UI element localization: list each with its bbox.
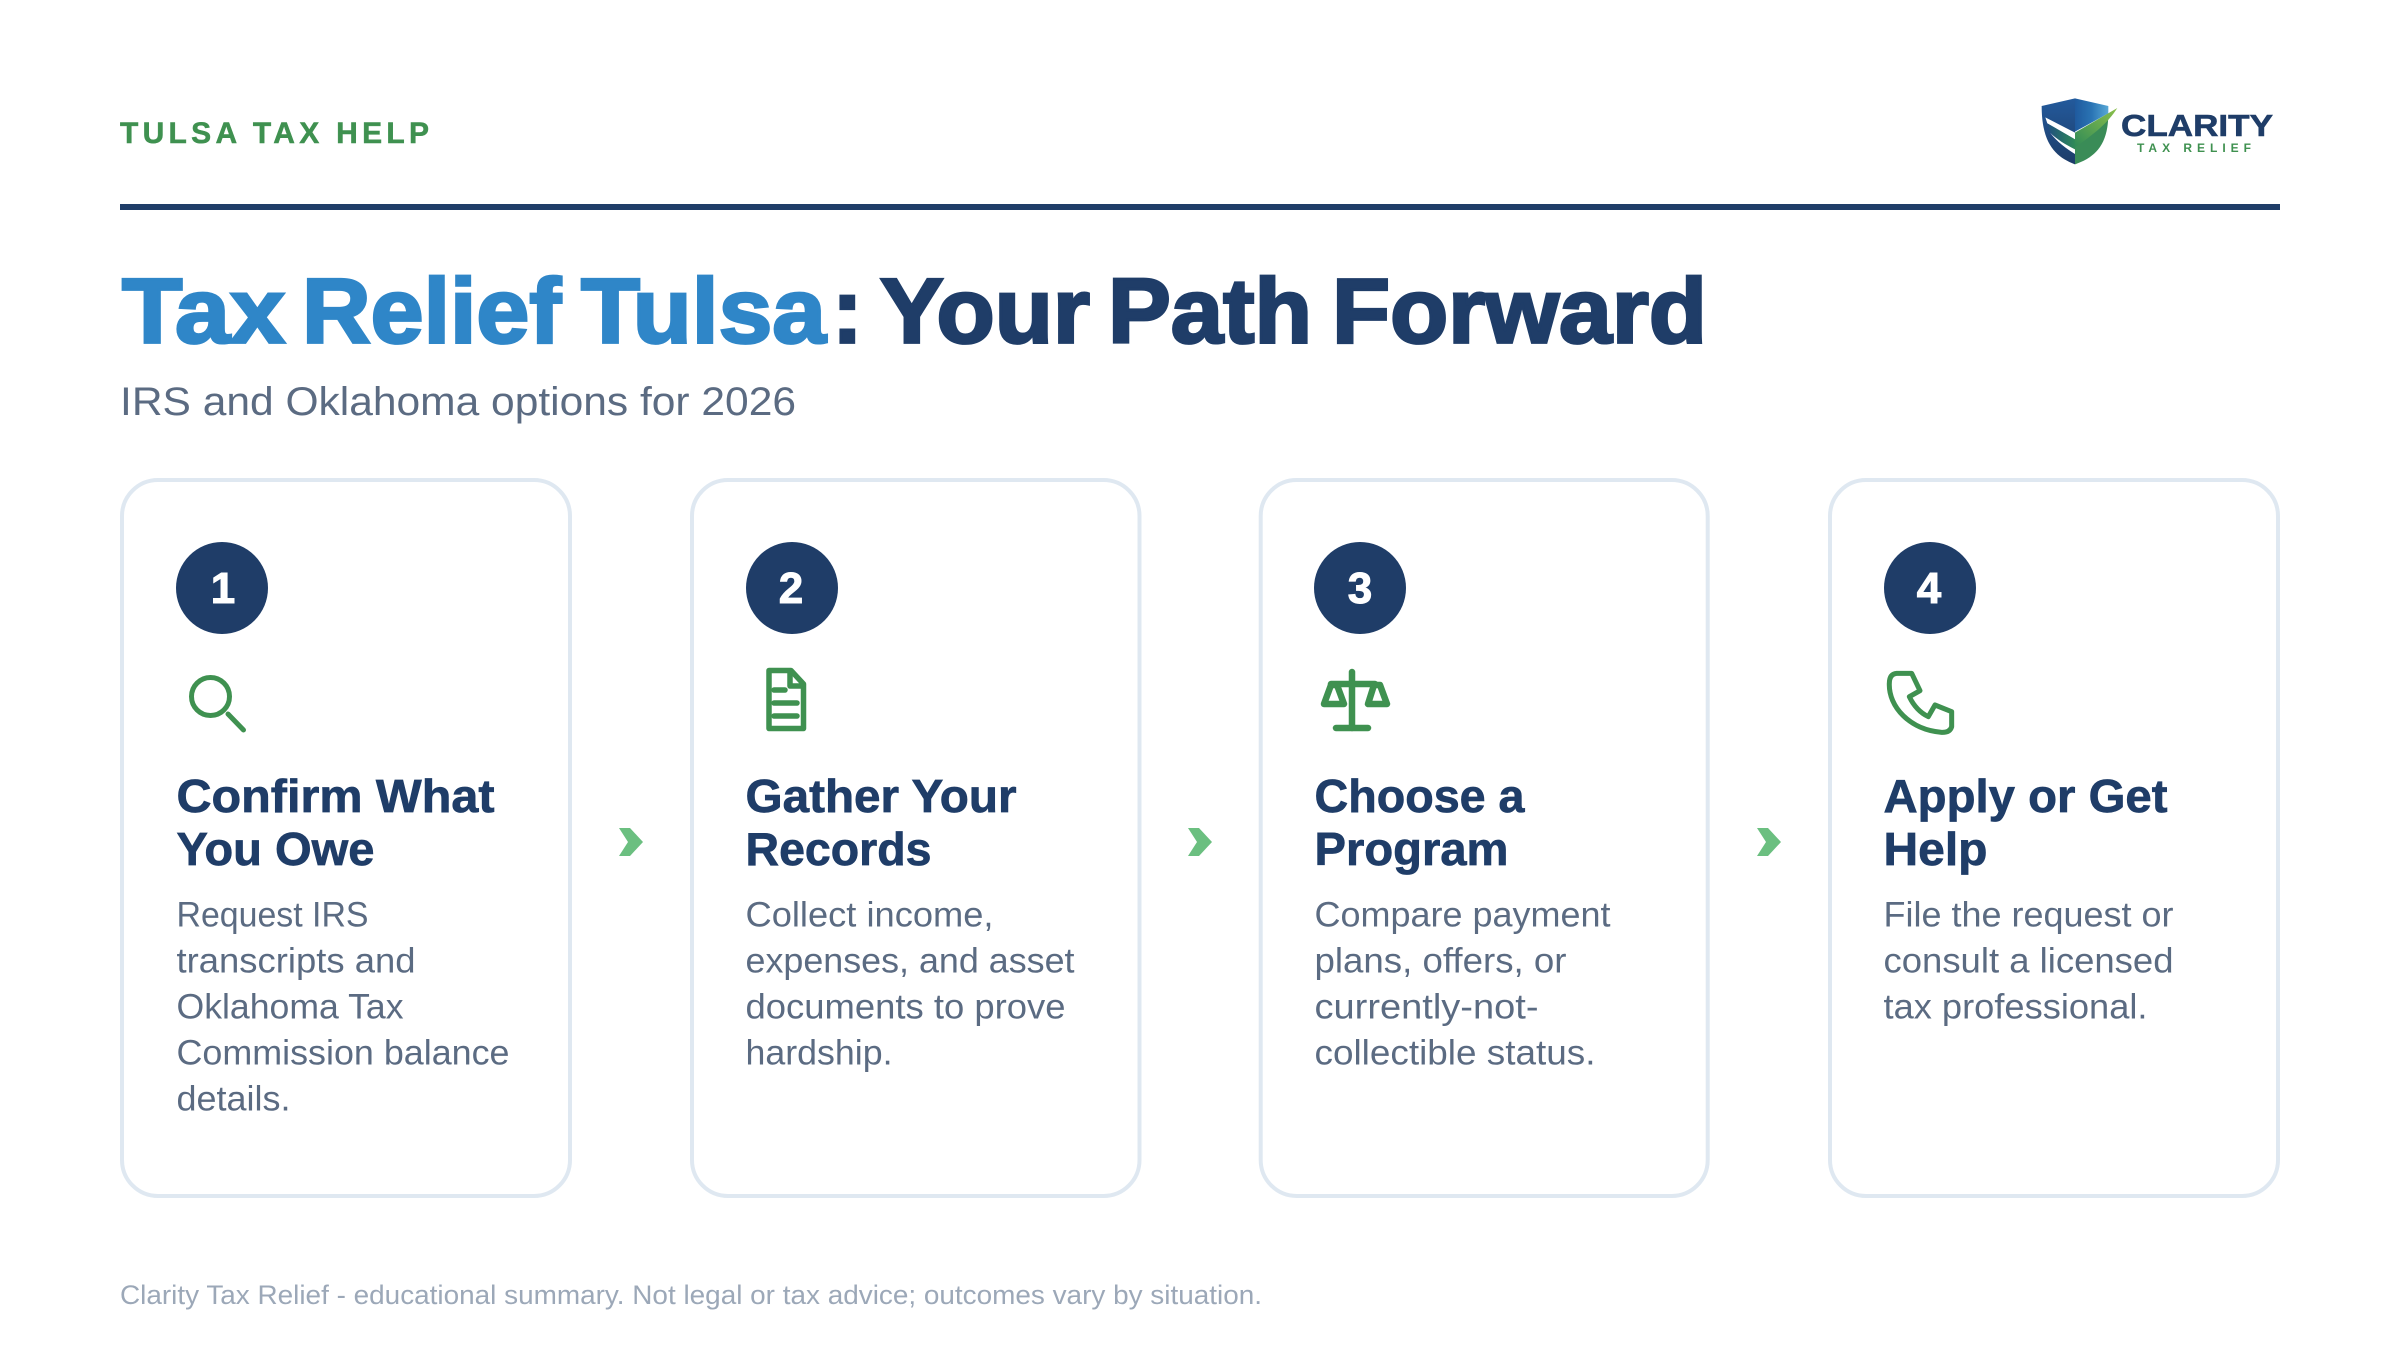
arrow 2 bbox=[1188, 828, 1212, 856]
body: step 3: plans, offers, or bbox=[1314, 942, 1567, 980]
panel: step 2 bbox=[692, 480, 1140, 1196]
logo wordmark: CLARITY bbox=[2121, 108, 2273, 143]
body: step 1: Commission balance bbox=[176, 1034, 510, 1072]
title: : bbox=[832, 260, 863, 362]
heading: step 2: Records bbox=[746, 823, 932, 875]
step number 4 bbox=[1884, 542, 1976, 634]
footer disclaimer: Clarity Tax Relief - educational summary. Not legal or tax advice; outcomes vary by situation. bbox=[120, 1280, 1262, 1310]
body: step 3: Compare payment bbox=[1314, 896, 1611, 934]
heading: step 4: Help bbox=[1884, 823, 1988, 875]
arrow 3 bbox=[1757, 828, 1781, 856]
icon: shield with check bbox=[2042, 98, 2117, 164]
body: step 3: currently-not- bbox=[1314, 988, 1538, 1026]
icon: phone bbox=[1889, 673, 1952, 732]
body: step 4 bbox=[1884, 896, 2174, 1026]
icon: balance scale bbox=[1324, 672, 1387, 728]
step number 2 bbox=[746, 542, 838, 634]
panel: step 3 bbox=[1261, 480, 1708, 1196]
step number 4: 4 bbox=[1917, 564, 1942, 613]
title: Forward bbox=[1332, 260, 1707, 362]
heading: step 3 bbox=[1314, 770, 1525, 875]
body: step 2: Collect income, bbox=[746, 896, 994, 934]
icon: document bbox=[769, 670, 804, 728]
arrow 1 bbox=[619, 828, 643, 856]
heading: step 1: You Owe bbox=[176, 823, 374, 875]
subtitle: IRS and Oklahoma options for 2026 bbox=[120, 380, 796, 424]
panel: step 1 bbox=[122, 480, 570, 1196]
title: Tax bbox=[122, 260, 285, 362]
icon: magnifier bbox=[192, 678, 244, 730]
body: step 2 bbox=[746, 896, 1075, 1072]
body: step 4: consult a licensed bbox=[1884, 942, 2174, 980]
body: step 4: tax professional. bbox=[1884, 988, 2148, 1026]
eyebrow label: TULSA TAX HELP bbox=[120, 117, 429, 150]
header rule bbox=[120, 204, 2280, 210]
title: Your bbox=[880, 260, 1090, 362]
step number 1 bbox=[176, 542, 268, 634]
title: Tulsa bbox=[581, 260, 827, 362]
body: step 3: collectible status. bbox=[1314, 1034, 1596, 1072]
logo: Clarity Tax Relief bbox=[2042, 98, 2273, 164]
heading: step 4: Apply or Get bbox=[1884, 770, 2168, 822]
heading: step 3: Choose a bbox=[1314, 770, 1525, 822]
body: step 2: documents to prove bbox=[746, 988, 1066, 1026]
body: step 2: expenses, and asset bbox=[746, 942, 1075, 980]
heading: step 1 bbox=[176, 770, 495, 875]
heading: step 2 bbox=[746, 770, 1017, 875]
step number 1: 1 bbox=[211, 564, 235, 613]
body: step 1: transcripts and bbox=[176, 942, 416, 980]
title: Relief bbox=[302, 260, 561, 362]
step number 2: 2 bbox=[779, 564, 803, 613]
title: Path bbox=[1108, 260, 1312, 362]
body: step 1: Oklahoma Tax bbox=[176, 988, 404, 1026]
panel: step 4 bbox=[1830, 480, 2278, 1196]
logo tagline: TAX RELIEF bbox=[2137, 141, 2251, 155]
body: step 1: details. bbox=[176, 1080, 290, 1118]
body: step 1 bbox=[176, 896, 510, 1118]
heading: step 4 bbox=[1884, 770, 2168, 875]
body: step 4: File the request or bbox=[1884, 896, 2174, 934]
heading: step 3: Program bbox=[1314, 823, 1508, 875]
title bbox=[122, 260, 1707, 362]
heading: step 1: Confirm What bbox=[176, 770, 495, 822]
heading: step 2: Gather Your bbox=[746, 770, 1017, 822]
body: step 2: hardship. bbox=[746, 1034, 892, 1072]
body: step 3 bbox=[1314, 896, 1611, 1072]
step number 3: 3 bbox=[1348, 564, 1372, 613]
step number 3 bbox=[1314, 542, 1406, 634]
body: step 1: Request IRS bbox=[176, 896, 368, 934]
